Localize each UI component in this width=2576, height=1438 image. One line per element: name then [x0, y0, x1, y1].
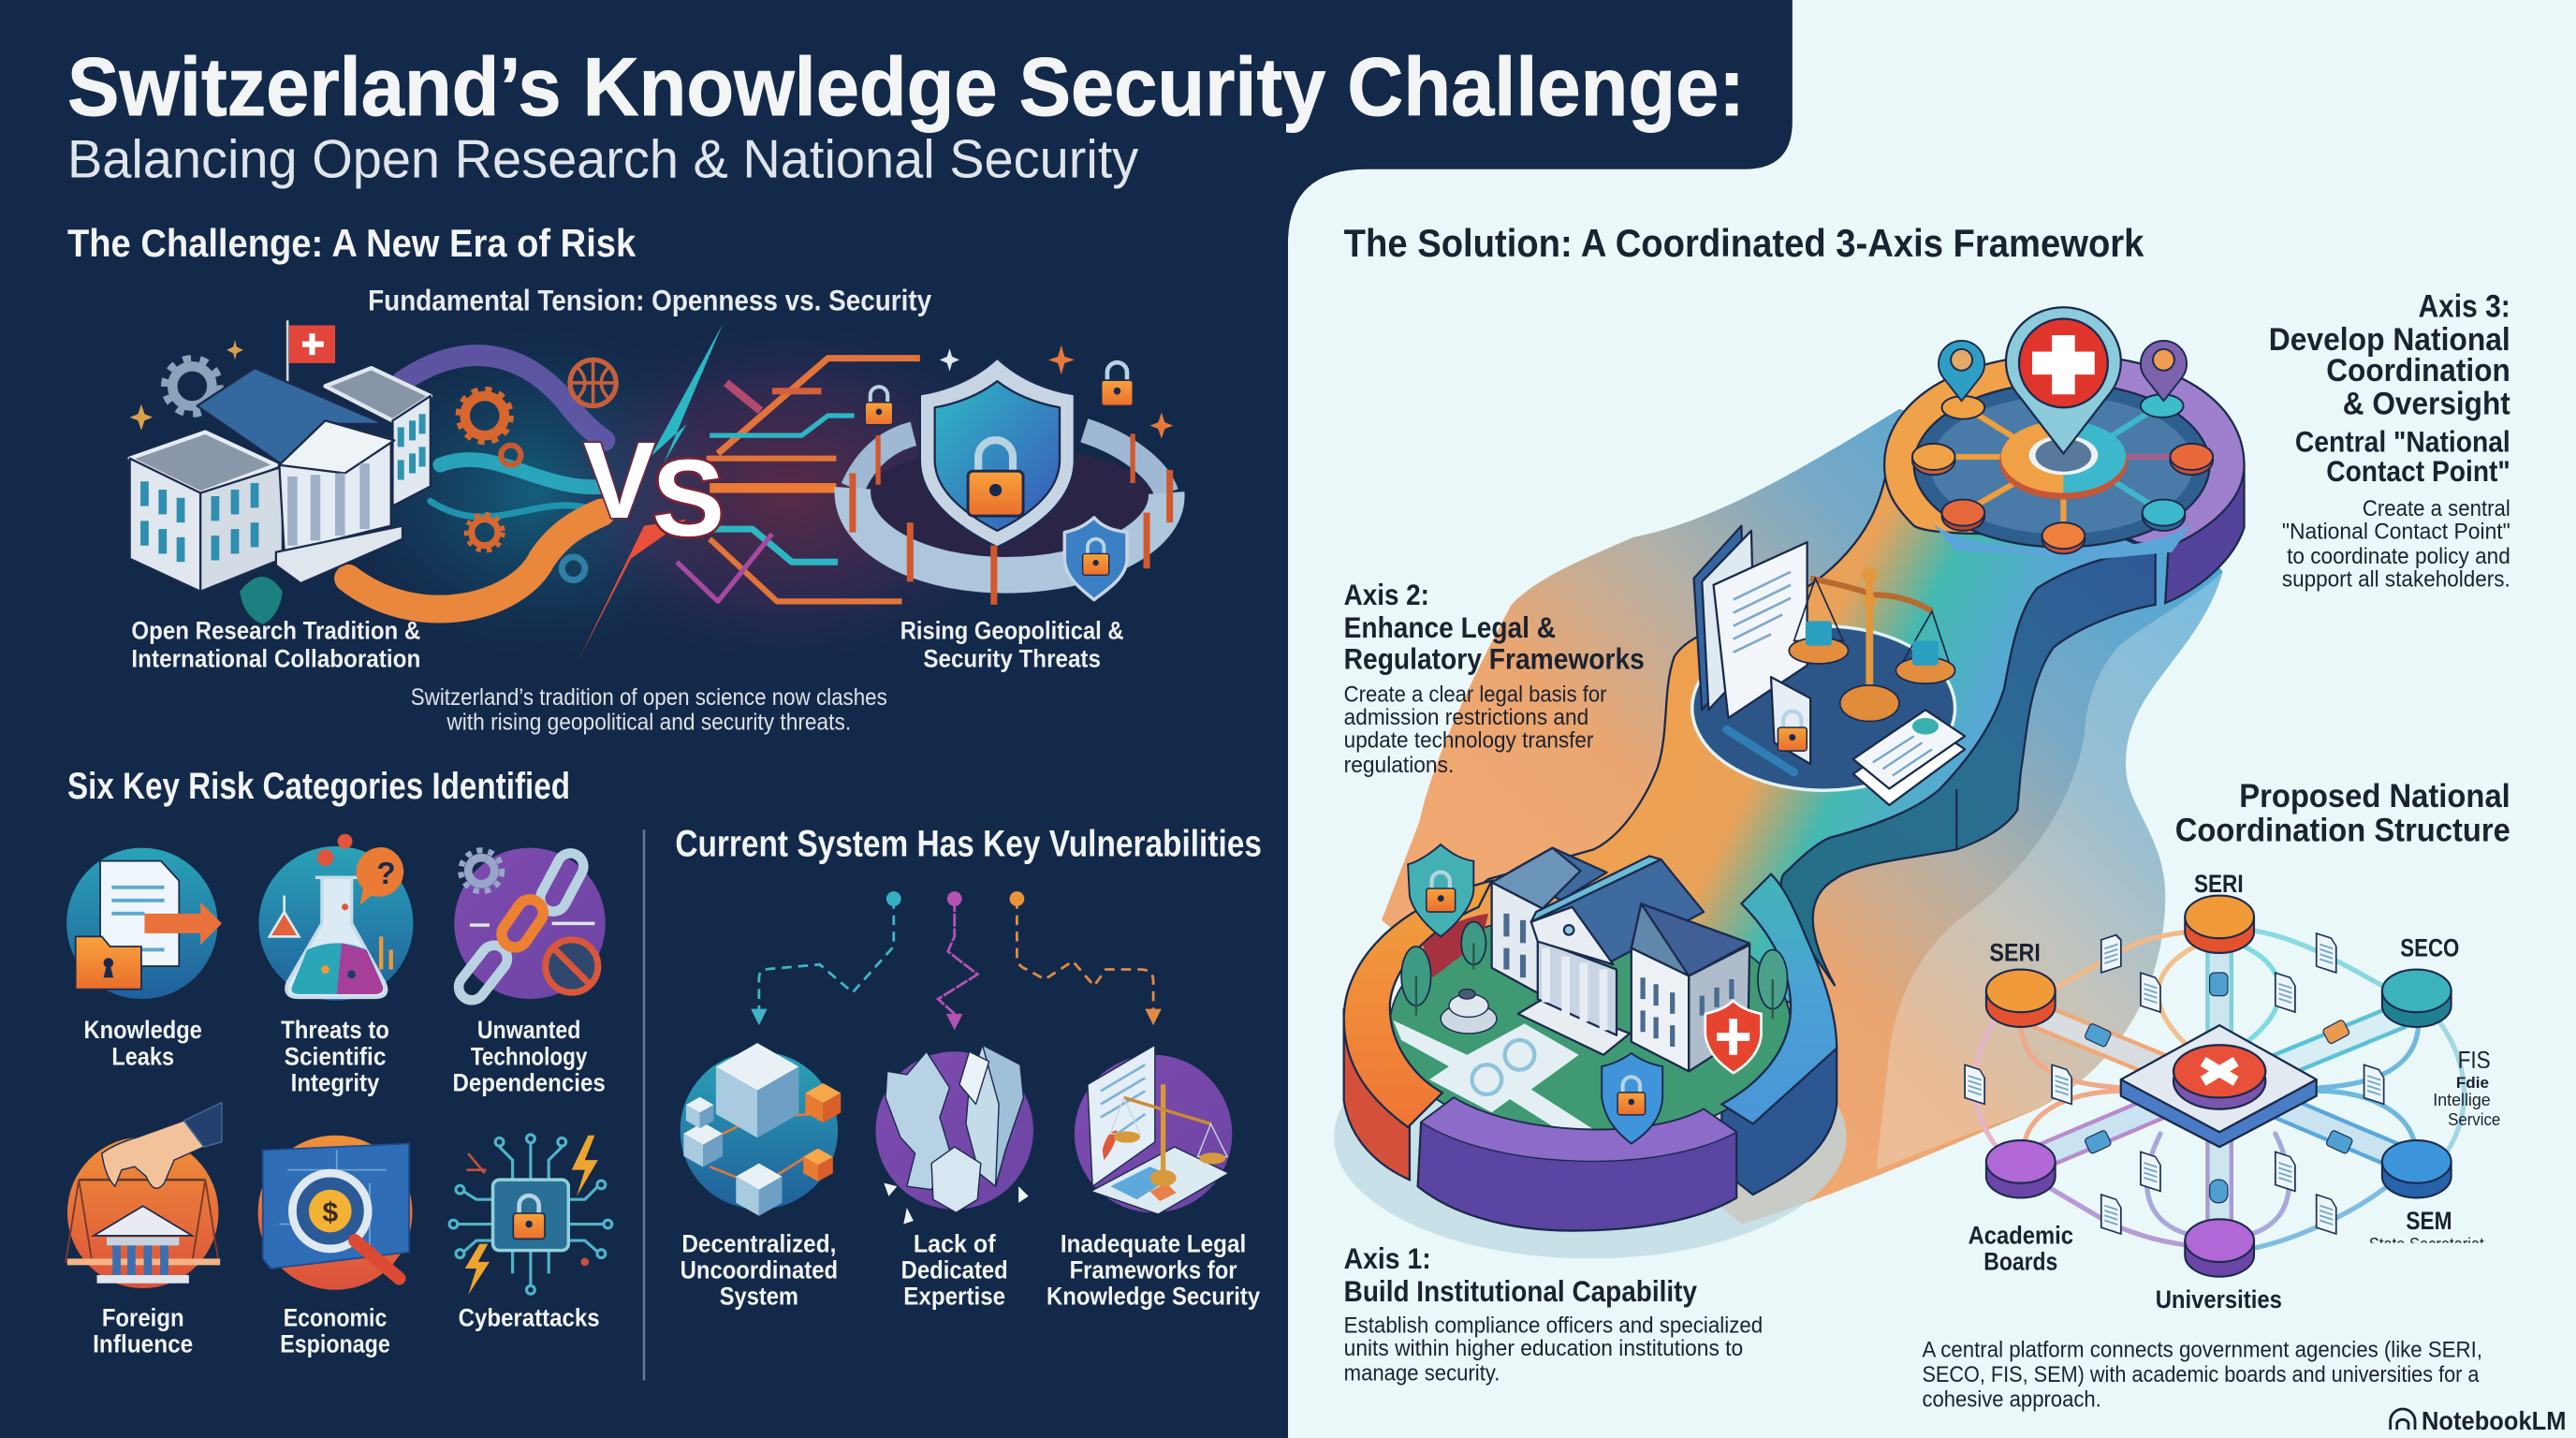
label: foreign influence: Influence — [93, 1328, 193, 1357]
ribbon wall — [1781, 552, 2156, 986]
label: foreign influence — [93, 1302, 193, 1357]
heading: coordination structure — [2175, 778, 2510, 849]
justice scale — [1789, 567, 1955, 721]
label: knowledge leaks: Knowledge — [84, 1015, 202, 1044]
label: threats to scientific integrity — [281, 1015, 389, 1096]
label: inadequate legal: Frameworks for — [1070, 1255, 1237, 1284]
axis 1 description — [1344, 1313, 1763, 1386]
label: knowledge leaks — [84, 1015, 202, 1070]
lightning split — [578, 324, 723, 661]
label: lack of expertise: Dedicated — [901, 1255, 1008, 1284]
threat lines — [677, 359, 920, 601]
network caption: A central platform connects government agencies (like SERI, — [1922, 1339, 2482, 1363]
label: threats to scientific integrity: Integrity — [291, 1067, 379, 1096]
axis 1 description: units within higher education institutions to — [1344, 1337, 1743, 1361]
label: threats to scientific integrity: Threats to — [281, 1015, 389, 1044]
axis 3 description: Create a sentral — [2363, 497, 2510, 521]
nodes — [1912, 394, 2213, 553]
axis 3 text: & Oversight — [2343, 386, 2510, 421]
label: inadequate legal — [1046, 1228, 1260, 1311]
purple wall — [2165, 465, 2244, 603]
heading: vulnerabilities: Current System Has Key Vulnerabilities — [675, 823, 1262, 864]
axis 2 text — [1344, 578, 1645, 675]
axis 2 text: Axis 2: — [1344, 578, 1429, 611]
node: bottom left — [1986, 1140, 2056, 1197]
icon: threats to scientific integrity: ? — [376, 857, 396, 891]
shield: right — [1705, 1001, 1761, 1073]
axis 1 text: Build Institutional Capability — [1344, 1274, 1697, 1308]
label: unwanted technology dependencies: Technology — [471, 1041, 587, 1070]
fountain — [1441, 990, 1497, 1034]
shadow — [1334, 1016, 1847, 1258]
axis 3 text: Central "National — [2295, 425, 2510, 459]
shield: front — [1602, 1053, 1662, 1144]
label: open research: International Collaboration — [131, 644, 420, 673]
network label: FIS: FIS — [2458, 1046, 2491, 1074]
label: lack of expertise: Lack of — [914, 1228, 996, 1257]
VS badge: V — [583, 419, 655, 541]
icon: cyberattacks — [449, 1135, 612, 1295]
shield: left — [1408, 844, 1473, 936]
central lock — [968, 440, 1023, 516]
central shield — [920, 359, 1075, 547]
network caption: cohesive approach. — [1922, 1387, 2101, 1412]
left wall — [1344, 1010, 1442, 1180]
label: cyberattacks: Cyberattacks — [459, 1302, 600, 1331]
network labels: Academic — [1969, 1221, 2073, 1250]
icon: unwanted technology dependencies — [453, 848, 606, 1005]
label: decentralized: System — [720, 1282, 798, 1311]
heading: coordination structure: Proposed National — [2239, 778, 2510, 814]
axis 3 description: support all stakeholders. — [2282, 568, 2510, 593]
axis 3 text: Develop National — [2269, 322, 2510, 358]
map pin: right — [2141, 341, 2187, 401]
connector arrows — [751, 891, 1162, 1030]
label: economic espionage: Espionage — [280, 1328, 390, 1357]
label: unwanted technology dependencies — [453, 1015, 606, 1096]
label: unwanted technology dependencies: Dependencies — [453, 1067, 606, 1096]
purple front wall — [1418, 1097, 1736, 1231]
icon: lack of dedicated expertise — [875, 1045, 1033, 1225]
platform ring — [1884, 355, 2244, 547]
packets — [2084, 973, 2353, 1203]
axis 1 text — [1344, 1241, 1697, 1308]
ribbon surface — [1412, 439, 2156, 1003]
wall ring — [130, 340, 1173, 605]
axis 2 description: update technology transfer — [1344, 729, 1594, 754]
axis 2 platform — [1692, 526, 1965, 805]
axis 2 description: admission restrictions and — [1344, 706, 1588, 730]
axis 1 description: manage security. — [1344, 1361, 1500, 1386]
central hub — [2121, 1025, 2317, 1147]
small shield — [1064, 518, 1127, 600]
label: inadequate legal: Inadequate Legal — [1061, 1228, 1246, 1257]
label: geopolitical threats: Rising Geopolitical & — [900, 616, 1123, 645]
axis 3 text: Contact Point" — [2326, 454, 2510, 488]
VS badge — [583, 419, 724, 559]
tension description — [411, 685, 887, 735]
right wall — [1721, 1049, 1837, 1195]
icon: decentralized system — [681, 1043, 841, 1216]
VS badge: S — [652, 437, 724, 559]
network caption — [1922, 1339, 2482, 1412]
axis 3 description: "National Contact Point" — [2282, 521, 2510, 545]
left ring arc — [1344, 881, 1492, 1127]
paths — [1393, 1020, 1595, 1131]
node: left — [1986, 970, 2056, 1027]
icon: threats to scientific integrity — [258, 834, 413, 1001]
network label: FIS: Intellige — [2433, 1090, 2491, 1109]
axis 3 text: Coordination — [2326, 353, 2510, 389]
label: threats to scientific integrity: Scientific — [285, 1041, 386, 1070]
heading: coordination structure: Coordination Structure — [2175, 813, 2510, 849]
axis 3 description: to coordinate policy and — [2287, 545, 2510, 569]
gears and globe — [165, 359, 616, 580]
network labels: Boards — [1983, 1247, 2057, 1276]
illustration: openness vs security — [130, 309, 1173, 677]
subtitle: Balancing Open Research & National Security — [67, 130, 1138, 190]
icon: economic espionage — [258, 1136, 413, 1290]
spokes — [1934, 404, 2191, 536]
label: decentralized: Uncoordinated — [681, 1255, 838, 1284]
label: unwanted technology dependencies: Unwanted — [477, 1015, 580, 1044]
heading: six key risks: Six Key Risk Categories Identified — [67, 766, 570, 807]
thick pipes — [2037, 945, 2402, 1232]
pen — [1727, 729, 1794, 772]
label: lack of expertise — [901, 1228, 1008, 1311]
map pin: left — [1939, 341, 1984, 401]
university building — [130, 320, 431, 624]
network label: FIS: Service — [2448, 1109, 2500, 1129]
outer connections — [1975, 930, 2464, 1249]
label: economic espionage: Economic — [284, 1302, 387, 1331]
light solution panel — [1288, 0, 2576, 1438]
network label: FIS: Fdie — [2456, 1074, 2489, 1092]
label: lack of expertise: Expertise — [903, 1282, 1005, 1311]
node: bottom — [2185, 1219, 2254, 1277]
books — [1694, 526, 1808, 718]
node: top — [2185, 896, 2254, 953]
axis 3 description — [2282, 497, 2510, 593]
title — [67, 41, 1745, 190]
network labels: SERI — [1989, 938, 2041, 967]
heading: the challenge: The Challenge: A New Era of Risk — [67, 221, 637, 265]
label: foreign influence: Foreign — [102, 1302, 184, 1331]
network labels: SEM — [2406, 1206, 2452, 1235]
map pin: swiss cross — [2006, 307, 2121, 453]
node: bottom right — [2382, 1140, 2452, 1197]
campus building — [1492, 848, 1749, 1071]
label: geopolitical threats: Security Threats — [923, 644, 1101, 673]
axis 2 text: Enhance Legal & — [1344, 610, 1556, 644]
label: geopolitical threats — [900, 616, 1123, 673]
network label: FIS — [2434, 1050, 2499, 1125]
trees — [1401, 922, 1788, 1019]
heading: fundamental tension: Fundamental Tension: Openness vs. Security — [368, 284, 932, 317]
axis 2 description — [1344, 682, 1607, 778]
axis 3 text — [2269, 289, 2510, 488]
axis 1 platform — [1334, 844, 1847, 1258]
axis 1 description: Establish compliance officers and specialized — [1344, 1313, 1763, 1338]
hub ring — [1999, 424, 2128, 500]
icon: knowledge leaks — [66, 848, 222, 999]
label: knowledge leaks: Leaks — [111, 1041, 174, 1070]
network labels: Universities — [2156, 1284, 2282, 1313]
axis 3 text: Axis 3: — [2419, 289, 2510, 325]
axis 3 platform — [1412, 307, 2244, 1003]
heading: the solution: The Solution: A Coordinated 3-Axis Framework — [1344, 221, 2144, 265]
node: right — [2382, 970, 2452, 1027]
label: economic espionage — [280, 1302, 390, 1357]
network labels: SERI — [2194, 869, 2244, 898]
label: open research: Open Research Tradition & — [131, 616, 420, 645]
tension description: with rising geopolitical and security threats. — [446, 710, 851, 735]
paper stack — [1853, 710, 1965, 805]
documents — [1965, 933, 2384, 1234]
tension description: Switzerland’s tradition of open science now clashes — [411, 685, 887, 711]
right ring arc — [1721, 874, 1837, 1123]
clipped SEM sublabel: State Secretariat — [2369, 1236, 2484, 1255]
axis 1 text: Axis 1: — [1344, 1241, 1431, 1275]
label: inadequate legal: Knowledge Security — [1046, 1282, 1260, 1311]
icon: inadequate legal frameworks — [1075, 1045, 1232, 1214]
icon: economic espionage: $ — [322, 1197, 338, 1228]
network labels — [1969, 869, 2459, 1313]
flows from the university — [348, 356, 605, 609]
label: open research — [131, 616, 420, 673]
lawn — [1390, 910, 1791, 1140]
label: decentralized: Decentralized, — [681, 1228, 836, 1257]
background swoosh — [1382, 409, 2223, 1225]
label: decentralized — [681, 1228, 838, 1311]
icon: foreign influence — [66, 1103, 222, 1288]
vertical divider — [643, 829, 645, 1380]
axis 2 description: regulations. — [1344, 754, 1454, 778]
network labels: SECO — [2400, 932, 2459, 961]
notebooklm logo: NotebookLM — [2422, 1406, 2566, 1435]
network diagram — [1965, 896, 2464, 1277]
network caption: SECO, FIS, SEM) with academic boards and universities for a — [1922, 1363, 2480, 1387]
axis 2 description: Create a clear legal basis for — [1344, 682, 1607, 707]
title: Switzerland’s Knowledge Security Challenge: — [67, 41, 1745, 133]
axis 2 text: Regulatory Frameworks — [1344, 641, 1645, 675]
locked document — [1771, 677, 1810, 764]
